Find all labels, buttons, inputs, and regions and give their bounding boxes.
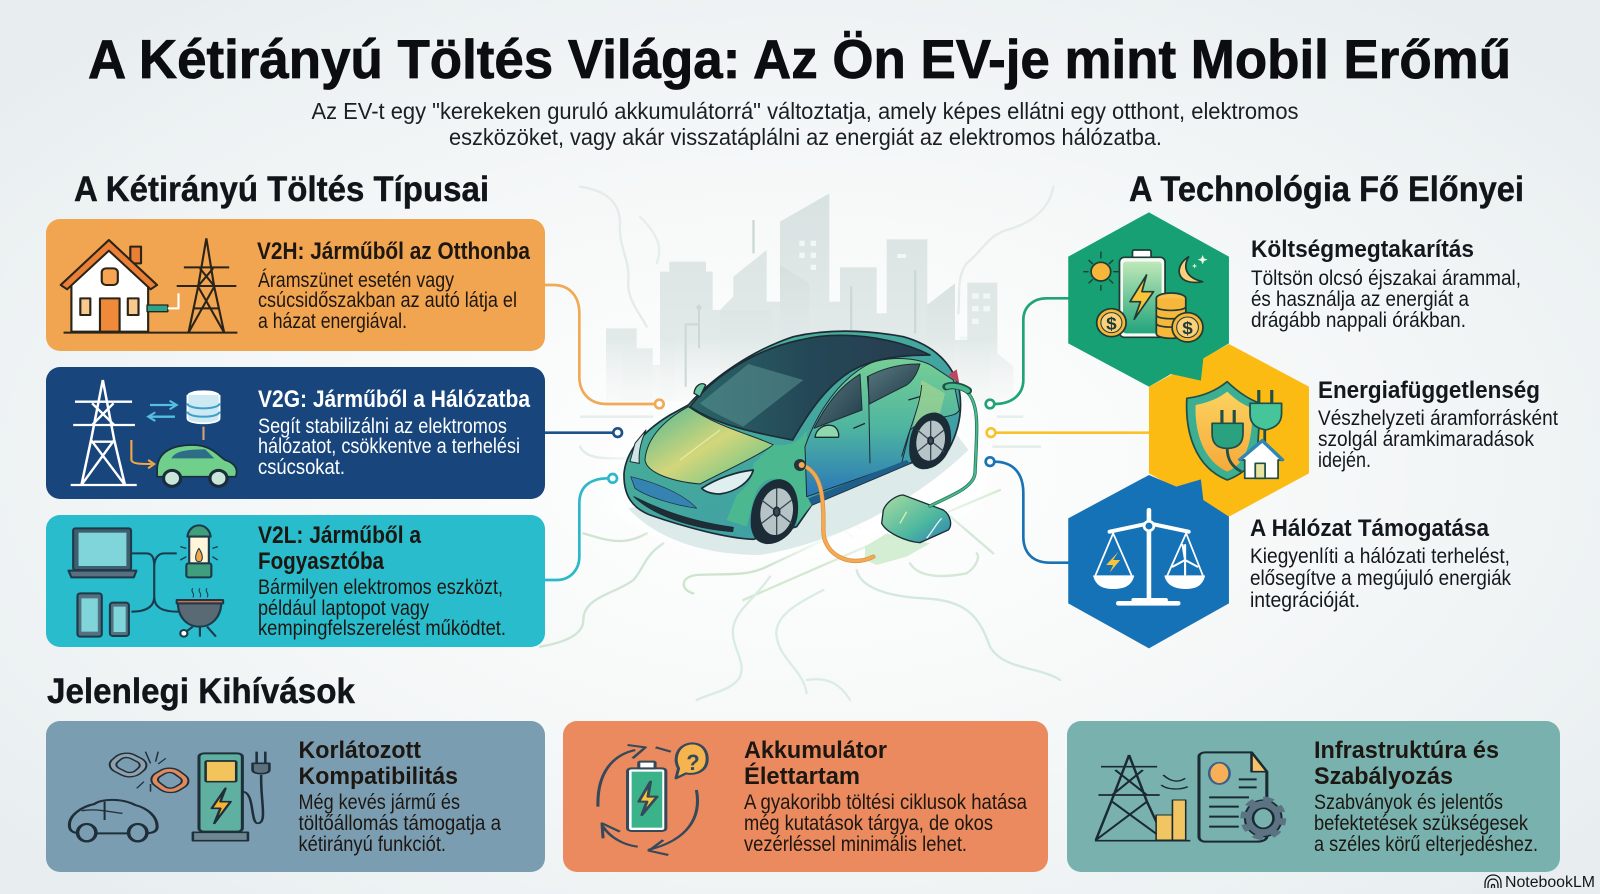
benefit text: savings: és használja az energiát a	[1251, 288, 1469, 311]
panel: V2G: hálózatot, csökkentve a terhelési	[258, 435, 520, 458]
panel: infrastructure: Szabványok és jelentős	[1314, 791, 1503, 814]
tail light	[948, 369, 959, 383]
panel: V2L: Bármilyen elektromos eszközt,	[258, 576, 503, 599]
panel: V2G: csúcsokat.	[258, 456, 345, 479]
headlights	[702, 470, 753, 494]
panel: compatibility: Korlátozott	[298, 737, 421, 764]
city skyline	[606, 193, 1013, 402]
icon: laptop, phones, lantern and grill	[69, 525, 223, 637]
hexagon: savings: $	[1106, 313, 1117, 333]
connector: navy to V2G	[545, 428, 622, 437]
hexagon: savings: $	[1182, 317, 1194, 338]
hexagon: energy independence	[1149, 344, 1309, 517]
connector: green to savings	[986, 298, 1070, 408]
panel: battery life: Élettartam	[744, 762, 860, 790]
hexagon: savings	[1068, 212, 1229, 387]
panel: compatibility: töltőállomás támogatja a	[298, 812, 501, 835]
panel: V2G	[46, 367, 545, 499]
panel: V2H: V2H: Járműből az Otthonba	[257, 238, 531, 265]
subtitle: Az EV-t egy "kerekeken guruló akkumulátorrá" változtatja, amely képes ellátni egy otthont, elektromos	[312, 98, 1298, 124]
panel: V2H: a házat energiával.	[258, 310, 407, 333]
windshield and roof	[690, 335, 930, 440]
icon: pylon, storage and car	[71, 380, 237, 486]
panel: battery life	[563, 721, 1048, 872]
subtitle	[312, 98, 1298, 150]
car body	[624, 331, 961, 539]
panel: battery life: ?	[686, 750, 700, 775]
panel: V2L: például laptopot vagy	[258, 597, 429, 620]
hood light streak	[680, 430, 720, 460]
connector: teal to V2L	[545, 474, 617, 580]
icon: car, broken chain and charging station	[69, 752, 269, 841]
title: A Kétirányú Töltés Világa: Az Ön EV-je mint Mobil Erőmű	[88, 28, 1511, 90]
benefit text: savings: Töltsön olcsó éjszakai árammal,	[1251, 267, 1521, 290]
panel: V2L: Fogyasztóba	[258, 548, 385, 575]
benefit text: independence: szolgál áramkimaradások	[1318, 428, 1534, 451]
icon: pylon, document and gear	[1095, 752, 1283, 842]
heading: benefits: A Technológia Fő Előnyei	[1129, 169, 1524, 209]
grille	[631, 477, 697, 508]
panel: V2H: csúcsidőszakban az autó látja el	[258, 289, 517, 312]
benefit text: independence: Vészhelyzeti áramforrásként	[1318, 407, 1558, 430]
panel: infrastructure: Szabályozás	[1314, 763, 1453, 790]
mirrors	[815, 425, 839, 437]
benefit text: savings: Költségmegtakarítás	[1251, 236, 1474, 263]
benefit text: grid support: A Hálózat Támogatása	[1250, 515, 1490, 542]
rear quarter highlight	[913, 380, 945, 427]
panel: V2L	[46, 515, 545, 647]
panel: V2L: V2L: Járműből a	[258, 522, 422, 549]
panel: V2H: Áramszünet esetén vagy	[258, 269, 454, 292]
icon: battery with cycle arrows	[598, 743, 707, 855]
benefit text: grid support: elősegítve a megújuló energiák	[1250, 567, 1511, 590]
panel: compatibility: Még kevés jármű és	[298, 791, 460, 814]
charger unit	[865, 495, 951, 565]
icon: shield with plugs and house	[1187, 382, 1283, 480]
panel: infrastructure: befektetések szükségesek	[1314, 812, 1528, 835]
connector: orange to V2H	[545, 285, 664, 408]
benefit text: grid support	[1250, 515, 1511, 612]
panel: V2L: kempingfelszerelést működtet.	[258, 617, 506, 640]
green charging cable	[930, 386, 977, 506]
panel: battery life: A gyakoribb töltési ciklusok hatása	[744, 791, 1027, 814]
panel: battery life: vezérléssel minimális lehet.	[744, 833, 967, 856]
panel: V2H	[46, 219, 545, 351]
benefit text: savings	[1251, 236, 1521, 332]
benefit text: independence: idején.	[1318, 449, 1371, 472]
front wheel	[752, 480, 797, 543]
pale circuit lines	[540, 187, 1060, 700]
benefit text: grid support: integrációját.	[1250, 589, 1360, 612]
panel: infrastructure	[1067, 721, 1560, 872]
central illustration: city, car and charger	[540, 187, 1150, 700]
hexagon: grid support	[1068, 475, 1229, 648]
connector: blue to grid support	[986, 457, 1070, 563]
lower intake	[634, 497, 733, 532]
panel: compatibility: kétirányú funkciót.	[298, 833, 446, 856]
panel: infrastructure: a széles körű elterjedéshez.	[1314, 833, 1538, 856]
icon: balance scale	[1094, 510, 1204, 603]
heading: challenges: Jelenlegi Kihívások	[47, 671, 355, 711]
icon: battery, sun, moon and coins	[1083, 250, 1203, 342]
rear wheel	[910, 413, 950, 468]
panel: V2G: Segít stabilizálni az elektromos	[258, 415, 507, 438]
car shadow	[628, 430, 968, 555]
panel: compatibility: Kompatibilitás	[298, 763, 458, 790]
lower sill	[808, 460, 910, 505]
door handle	[853, 397, 920, 428]
connector: yellow to independence	[987, 428, 1150, 437]
panel: battery life: Akkumulátor	[744, 737, 887, 764]
car	[624, 331, 961, 543]
orange charging cable	[794, 459, 873, 561]
watermark: NotebookLM: NotebookLM	[1505, 874, 1595, 891]
hood	[645, 407, 773, 484]
benefit text: grid support: Kiegyenlíti a hálózati terhelést,	[1250, 545, 1510, 568]
front fender and door panels	[727, 430, 812, 527]
benefit text: savings: drágább nappali órákban.	[1251, 309, 1466, 332]
heading: types: A Kétirányú Töltés Típusai	[74, 169, 489, 209]
panel: compatibility	[46, 721, 545, 872]
ground halo	[580, 393, 1007, 567]
benefit text: independence: Energiafüggetlenség	[1318, 377, 1540, 404]
icon: house and pylon	[61, 238, 237, 333]
panel: battery life: még kutatások tárgya, de okos	[744, 812, 993, 835]
benefit hexagons and icons	[1068, 212, 1309, 648]
panel: V2G: V2G: Járműből a Hálózatba	[258, 386, 531, 413]
subtitle: eszközöket, vagy akár visszatáplálni az energiát az elektromos hálózatba.	[449, 124, 1162, 150]
benefit text: independence	[1318, 377, 1558, 472]
panel: infrastructure: Infrastruktúra és	[1314, 737, 1499, 764]
side windows	[814, 374, 862, 428]
